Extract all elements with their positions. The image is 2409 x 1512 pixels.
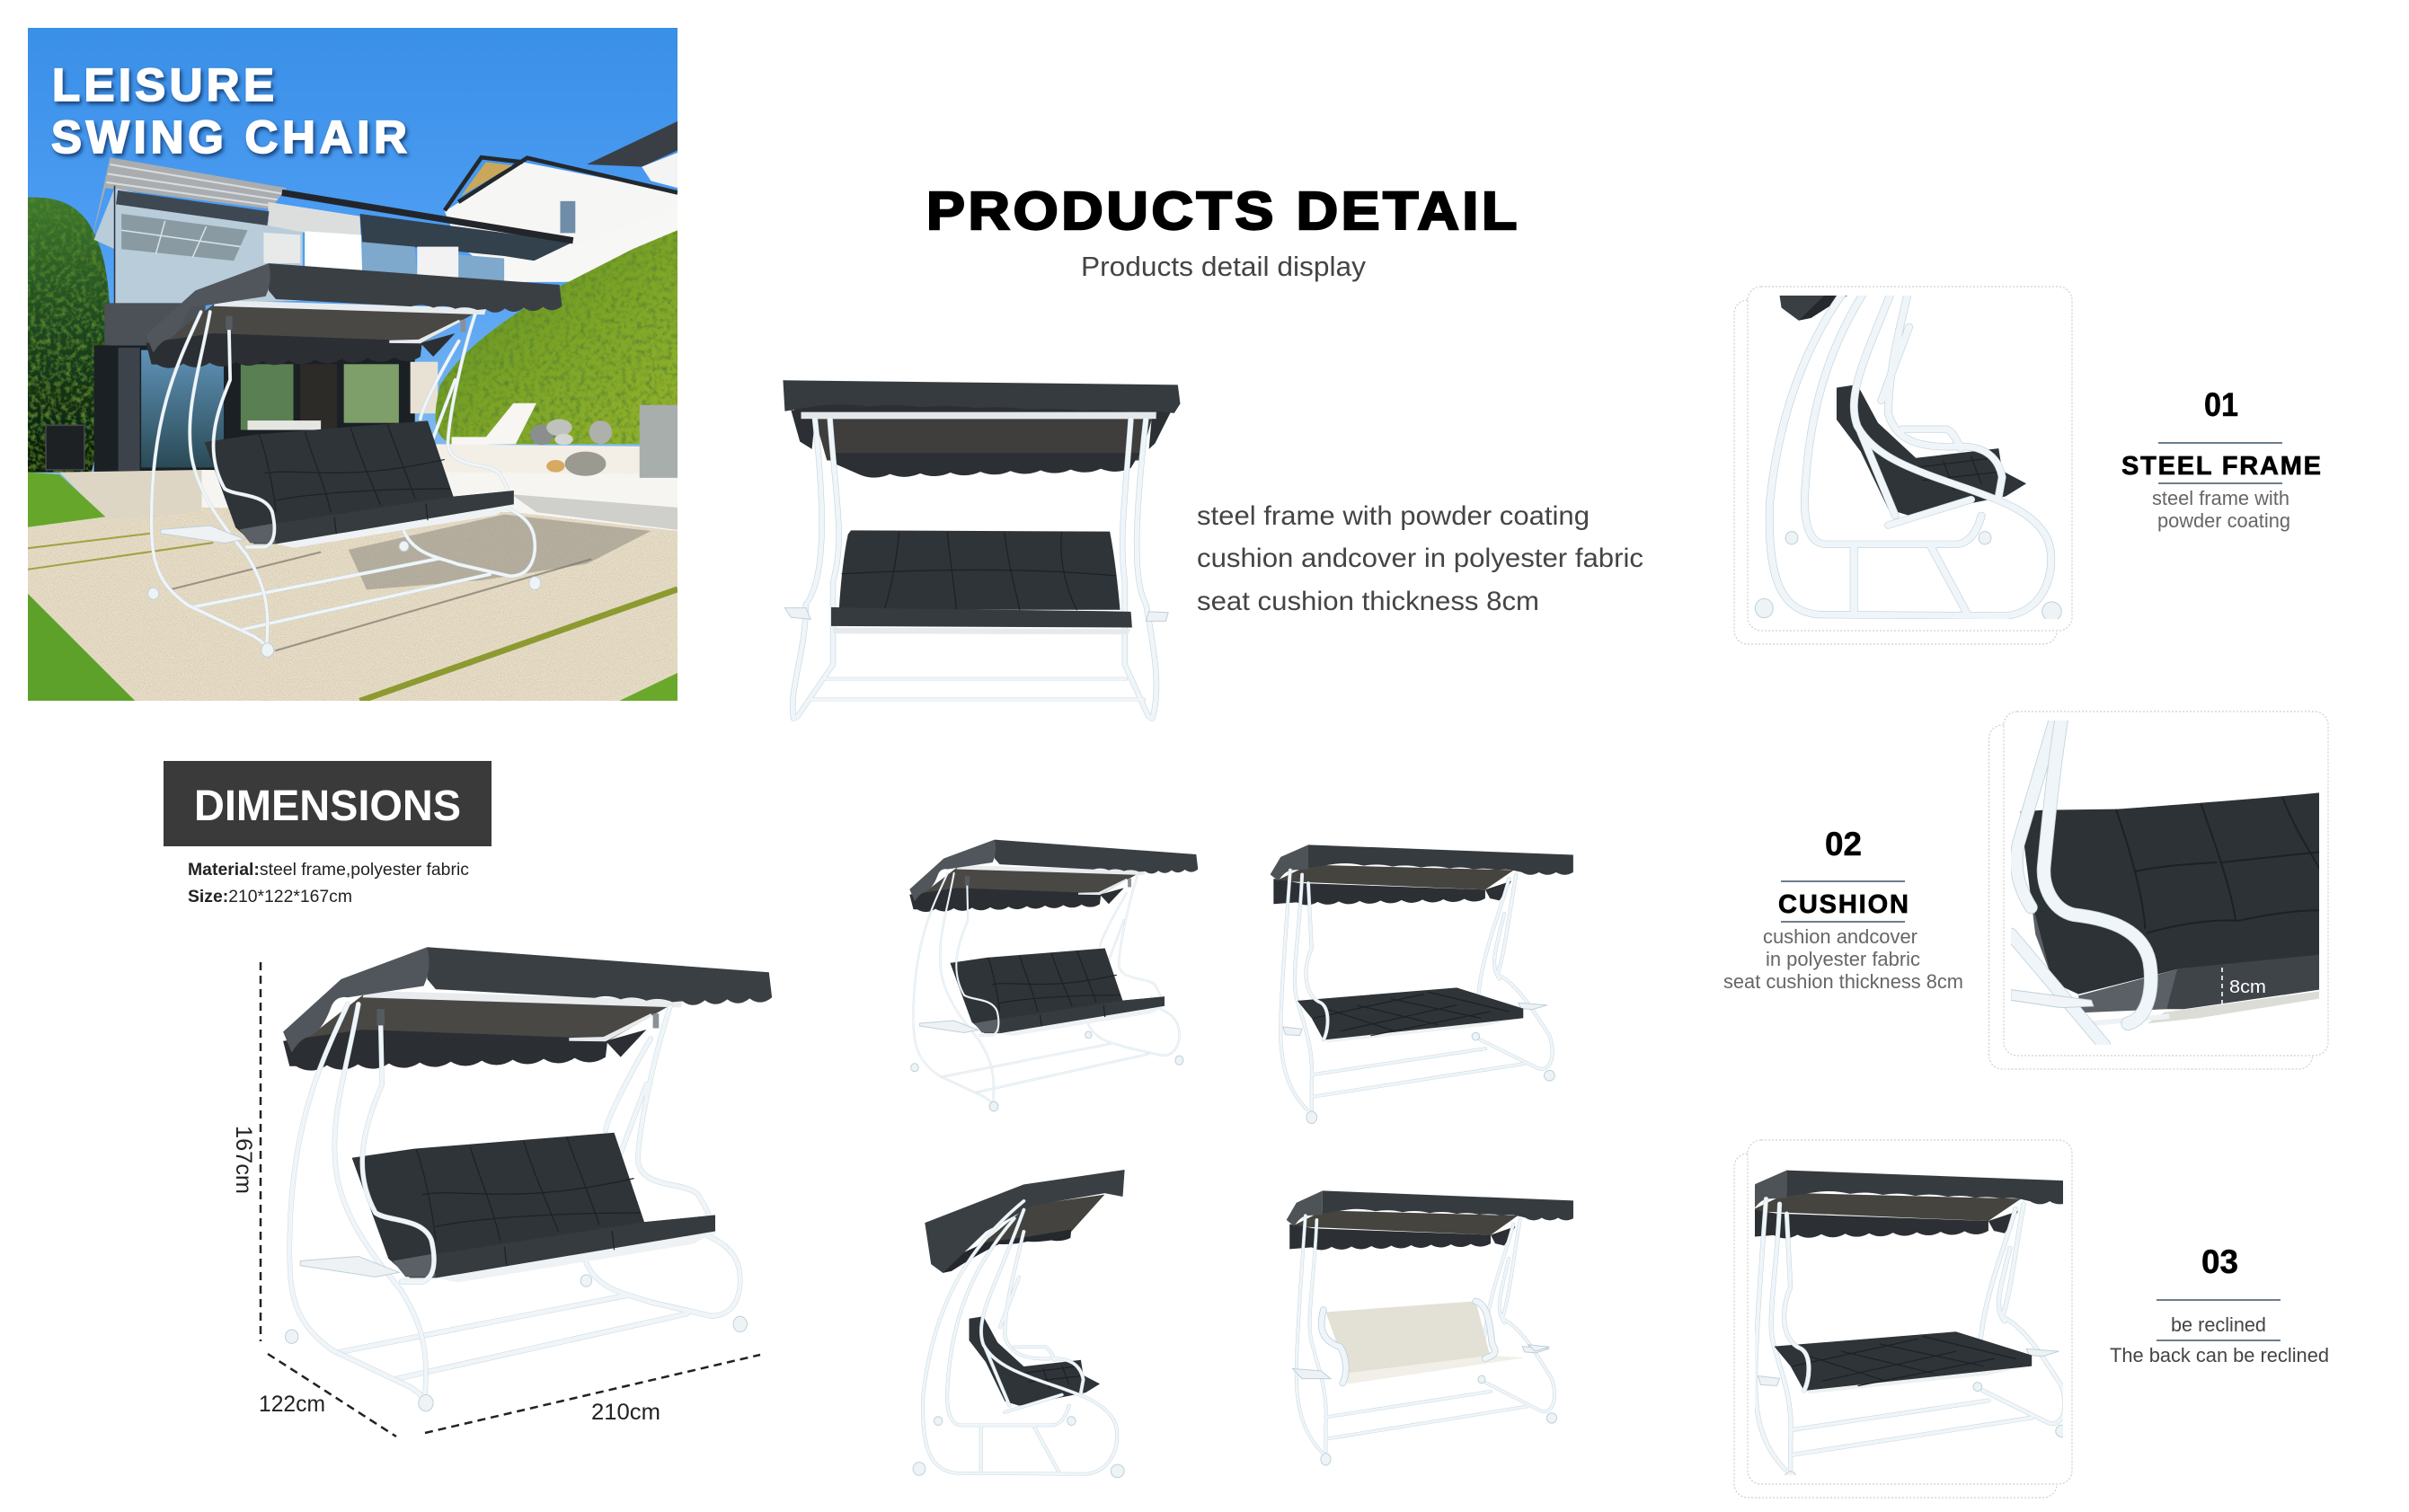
product description: seat cushion thickness 8cm (1197, 587, 1539, 616)
dimension lines (261, 962, 760, 1437)
photo background scene (27, 28, 678, 701)
feature 1 text (2121, 386, 2321, 532)
feature 1 text: steel frame with (2152, 487, 2289, 509)
dimension labels: 122cm (259, 1392, 325, 1417)
product description (1197, 501, 1643, 616)
hero title text: LEISURE (52, 59, 274, 111)
gallery: seat up (909, 840, 1198, 1111)
hero title text: SWING CHAIR (51, 111, 407, 163)
feature 2 text: seat cushion thickness 8cm (1723, 970, 1963, 993)
feature 2 text: CUSHION (1778, 890, 1909, 919)
dimension labels: 210cm (591, 1400, 660, 1425)
dimension labels: 167cm (231, 1126, 256, 1194)
feature 2 text: in polyester fabric (1766, 948, 1920, 970)
feature card 2: cushion image (1989, 712, 2328, 1069)
hero swing chair (146, 263, 562, 657)
gallery: beige sling seat (1287, 1190, 1574, 1465)
product description: steel frame with powder coating (1197, 501, 1590, 531)
subtitle: Products detail display (1081, 251, 1367, 282)
dimension labels (231, 1126, 660, 1425)
feature 3 text: 03 (2201, 1243, 2238, 1280)
hero photo panel (27, 28, 678, 701)
feature card 1: steel frame image (1734, 286, 2072, 645)
feature 1 text: powder coating (2157, 509, 2290, 532)
feature 2 text: cushion andcover (1763, 925, 1917, 948)
material and size: Material:steel frame,polyester fabric (188, 860, 469, 880)
feature 2 text: 02 (1825, 826, 1862, 862)
feature 1 text: STEEL FRAME (2121, 452, 2321, 481)
product description: cushion andcover in polyester fabric (1197, 544, 1643, 573)
gallery: seat flat (1271, 844, 1573, 1124)
feature 3 text (2110, 1243, 2329, 1366)
feature 1 text: 01 (2204, 386, 2238, 423)
feature card 3: recline image (1734, 1140, 2089, 1498)
hero title text (51, 59, 407, 163)
8cm marker: 8cm (2229, 977, 2266, 997)
feature 3 text: The back can be reclined (2110, 1344, 2329, 1366)
gallery: side view (913, 1170, 1125, 1478)
feature 2 text (1723, 826, 1963, 993)
8cm marker (2222, 968, 2266, 1006)
dimensions heading: DIMENSIONS (194, 783, 461, 830)
material and size (188, 860, 469, 906)
title: PRODUCTS DETAIL (926, 181, 1517, 241)
front view swing chair (783, 380, 1181, 720)
dimensioned swing chair (283, 947, 772, 1411)
feature 3 text: be reclined (2171, 1313, 2266, 1336)
material and size: Size:210*122*167cm (188, 887, 352, 906)
dimensions heading (164, 761, 492, 846)
